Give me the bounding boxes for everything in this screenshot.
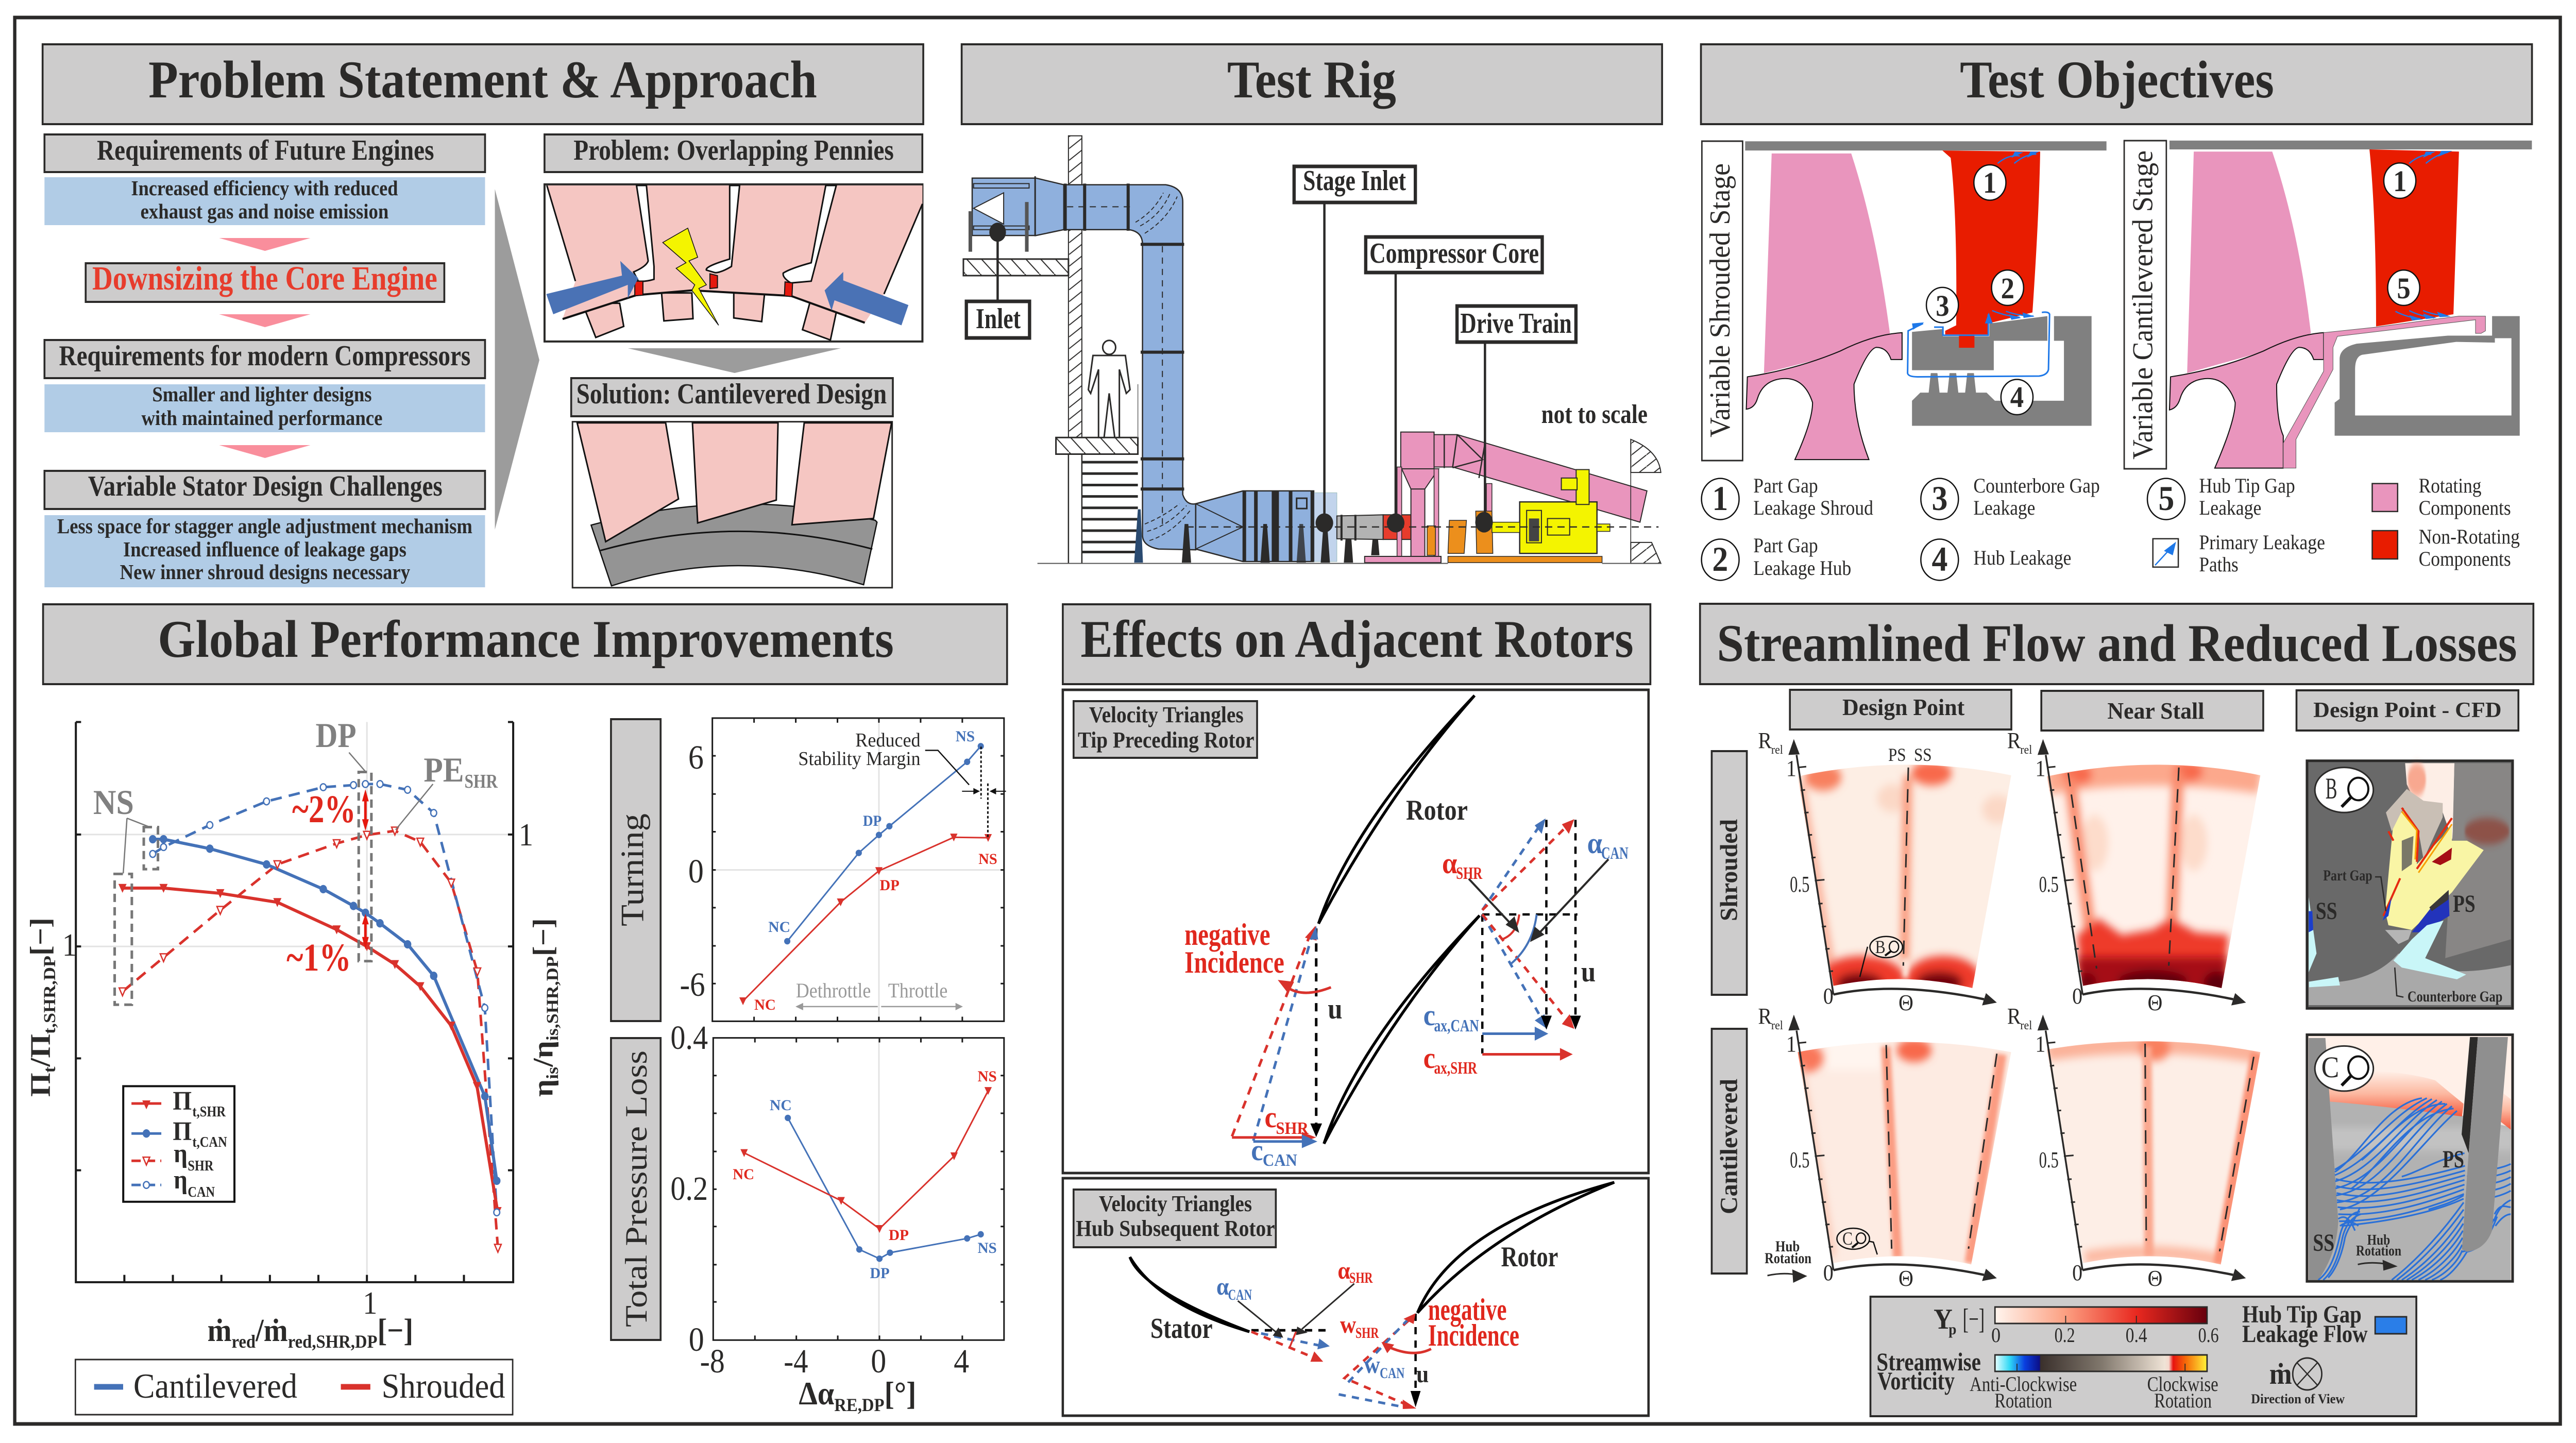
colour bar: total pressure loss [1934, 1303, 2219, 1347]
subheading: requirements of future engines: Requirements of Future Engines [97, 134, 434, 166]
colour bar: total pressure loss: Y [1934, 1303, 1953, 1335]
axis labels: cantilevered near stall: R [2007, 1004, 2021, 1029]
text: leakage numbers: 2 [2001, 272, 2014, 305]
text: leakage numbers: 1 [1712, 479, 1728, 518]
axis labels: shrouded near stall: R [2007, 728, 2021, 753]
axis labels: shrouded near stall: 0.5 [2039, 872, 2059, 897]
tick labels: turning and loss charts: 0.4 [670, 1018, 708, 1057]
panel: global performance improvements [25, 604, 1007, 1415]
legend: configuration [75, 1360, 513, 1415]
panel: streamlined flow and reduced losses [1700, 604, 2533, 1416]
text block: engine requirements: Increased efficiency with reduced [131, 177, 398, 200]
text: leakage numbers: 5 [2397, 272, 2411, 305]
text block: engine requirements: exhaust gas and noise emission [141, 200, 388, 223]
axis label: total pressure ratio: [−] [25, 918, 56, 956]
annotation: hub rotation [1765, 1238, 1811, 1283]
text: legend descriptions: Rotating [2419, 474, 2481, 497]
panel: problem statement and approach [43, 44, 923, 588]
image: cfd detail C: C [2321, 1051, 2339, 1084]
legend: direction of view: ṁ [2269, 1357, 2292, 1390]
labels: tip velocity symbols: CAN [1263, 1151, 1297, 1170]
legend: colour scales [1870, 1297, 2416, 1416]
labels: turning operating points: NC [770, 1097, 792, 1114]
heat map: shrouded design point [1788, 739, 2021, 1006]
annotation: hub rotation: Hub [1775, 1238, 1800, 1255]
legend: direction of view [2251, 1357, 2345, 1406]
annotation: reduced stability margin: Reduced [855, 729, 921, 751]
text: leakage numbers: 2 [1712, 540, 1728, 579]
tag: hub subsequent rotor [1074, 1190, 1276, 1247]
diagram: shrouded stage section [1745, 141, 2107, 460]
labels: tip velocity symbols: SHR [1456, 864, 1483, 883]
callout: negative incidence hub: Incidence [1428, 1319, 1519, 1353]
colour bar: total pressure loss: 0.2 [2055, 1324, 2075, 1347]
label: variable cantilevered stage [2124, 141, 2166, 469]
label: rotor tip: Rotor [1406, 794, 1468, 826]
colour bar: streamwise vorticity [1876, 1348, 2218, 1412]
image: cfd detail B: SS [2316, 897, 2337, 924]
label: compressor core: Compressor Core [1369, 237, 1539, 269]
colour bar: total pressure loss: 0.6 [2198, 1324, 2219, 1347]
legend: map series labels: η [174, 1165, 188, 1195]
axis label: reduced mass flow: /ṁ [255, 1313, 288, 1348]
axis label: incidence change: Δα [799, 1376, 834, 1412]
annotation: throttle direction: Dethrottle [796, 979, 871, 1002]
axis labels: cantilevered design point: Θ [1899, 1266, 1913, 1291]
heading: problem statement [43, 44, 923, 124]
axis labels: cantilevered design point: 1 [1786, 1032, 1797, 1057]
text: legend descriptions: Leakage [2199, 497, 2261, 519]
legend: hub tip gap leakage flow [2242, 1300, 2406, 1347]
colour bar: streamwise vorticity: Vorticity [1877, 1367, 1955, 1396]
panel: test rig [962, 44, 1662, 564]
axis labels: shrouded design point: PS [1888, 745, 1906, 765]
labels: turning operating points [733, 728, 997, 1282]
tick labels: turning and loss charts: 0 [688, 852, 704, 890]
legend: map series labels: t,SHR [193, 1104, 226, 1119]
label: total pressure loss [611, 1038, 660, 1340]
axes: cantilevered near stall [2038, 1014, 2246, 1281]
column head: design point [1790, 690, 2011, 729]
text: legend descriptions: Hub Leakage [1973, 547, 2071, 569]
callout: negative incidence tip: negative [1184, 918, 1270, 952]
legend: direction of view: Direction of View [2251, 1392, 2345, 1406]
labels: hub velocity symbols: α [1337, 1257, 1350, 1284]
text: leakage numbers: 4 [2010, 381, 2024, 414]
axis labels: shrouded design point: rel [1771, 743, 1783, 756]
legend: map series labels: CAN [188, 1184, 215, 1200]
axis label: total pressure ratio: Π [25, 1073, 56, 1097]
labels: turning operating points: NS [977, 1240, 997, 1257]
labels: turning operating points: NS [956, 728, 975, 745]
annotation: throttle direction [796, 979, 947, 1002]
panel: effects on adjacent rotors [1063, 604, 1650, 1416]
heading: test objectives: Test Objectives [1960, 50, 2274, 109]
label: inlet: Inlet [976, 302, 1021, 335]
text block: design challenges: Increased influence of leakage gaps [123, 538, 406, 561]
label: variable cantilevered stage: Variable Cantilevered Stage [2126, 150, 2159, 460]
image: cfd detail B: B [2326, 772, 2337, 805]
label: turning [611, 719, 660, 1021]
axis labels: cantilevered design point: rel [1771, 1018, 1783, 1032]
labels: turning operating points: NC [754, 996, 776, 1013]
arrow: grey down [628, 348, 841, 373]
tag: tip preceding rotor [1074, 701, 1257, 758]
axis labels: shrouded near stall: 0 [2072, 984, 2082, 1009]
axis label: reduced mass flow: ṁ [208, 1313, 232, 1348]
text block: design challenges: New inner shroud designs necessary [120, 561, 410, 584]
labels: hub velocity symbols: CAN [1228, 1286, 1252, 1303]
axis labels: shrouded design point [1758, 728, 1932, 1015]
labels: turning operating points: DP [889, 1227, 909, 1244]
row label: cantilevered: Cantilevered [1716, 1079, 1742, 1214]
axes: cantilevered design point [1788, 1014, 1997, 1281]
axis label: reduced mass flow: [−] [377, 1313, 413, 1348]
heading: effects on adjacent rotors: Effects on Adjacent Rotors [1080, 610, 1634, 669]
axis label: total pressure ratio: t,SHR,DP [41, 956, 59, 1034]
tick labels: turning and loss charts: -4 [784, 1342, 808, 1380]
labels: hub velocity symbols: SHR [1355, 1325, 1379, 1342]
labels: turning operating points: DP [863, 812, 882, 829]
text: legend descriptions [1753, 474, 2520, 580]
axis labels: cantilevered design point: 0 [1823, 1261, 1834, 1285]
row label: shrouded: Shrouded [1716, 819, 1742, 921]
text: leakage numbers: 3 [1936, 290, 1950, 322]
text block: design challenges: Less space for stagger angle adjustment mechanism [57, 515, 472, 538]
axis labels: shrouded design point: R [1758, 728, 1772, 753]
subheading: design challenges: Variable Stator Design Challenges [88, 470, 443, 502]
label: drive train: Drive Train [1460, 307, 1572, 339]
panel: hub subsequent rotor [1063, 1178, 1649, 1416]
legend: map series labels [173, 1086, 227, 1200]
label: peak efficiency: PE [423, 751, 464, 790]
labels: tip velocity symbols: u [1328, 993, 1343, 1025]
text: leakage numbers [1712, 165, 2411, 579]
labels: turning operating points: NS [977, 1068, 997, 1085]
tick labels: map: 1 [363, 1285, 377, 1321]
axis label: efficiency ratio: η [528, 1079, 559, 1097]
row label: shrouded [1711, 751, 1747, 995]
text: legend descriptions: Part Gap [1753, 474, 1818, 497]
axis labels: shrouded near stall: Θ [2147, 991, 2162, 1015]
label: variable shrouded stage: Variable Shrouded Stage [1704, 163, 1736, 437]
row label: cantilevered [1711, 1029, 1747, 1274]
colour bar: total pressure loss: 0 [1991, 1324, 2001, 1347]
axis labels: cantilevered near stall: 0 [2072, 1261, 2082, 1285]
axis labels: cantilevered near stall: rel [2020, 1018, 2032, 1032]
legend: map series labels: t,CAN [193, 1134, 227, 1150]
axis labels: cantilevered design point [1758, 1004, 1913, 1291]
callout: negative incidence hub: negative [1428, 1293, 1506, 1327]
annotation: reduced stability margin: Stability Margin [798, 748, 921, 769]
legend: map series labels: Π [173, 1116, 192, 1146]
axis label: efficiency ratio: [−] [528, 918, 559, 956]
labels: hub velocity symbols [1216, 1257, 1429, 1387]
subheading: modern compressors: Requirements for modern Compressors [59, 339, 470, 372]
labels: hub velocity symbols: w [1364, 1351, 1380, 1378]
colour bar: streamwise vorticity: Anti-Clockwise [1970, 1373, 2077, 1396]
text: legend descriptions: Components [2419, 548, 2511, 570]
labels: hub velocity symbols: w [1340, 1311, 1356, 1338]
heading: streamlined flow: Streamlined Flow and Reduced Losses [1717, 614, 2517, 673]
labels: turning operating points: NC [768, 919, 790, 936]
legend: map series labels: η [174, 1139, 188, 1168]
heading: test rig: Test Rig [1227, 50, 1396, 109]
axis label: incidence change: [°] [884, 1376, 916, 1412]
axis labels: shrouded design point: 1 [1786, 756, 1797, 781]
axis labels: shrouded near stall: 1 [2035, 756, 2045, 781]
text block: compressor requirements: with maintained performance [141, 406, 382, 430]
callout: downsizing the core engine: Downsizing the Core Engine [92, 259, 437, 297]
text: leakage numbers: 5 [2158, 479, 2174, 518]
tick labels: turning and loss charts [670, 738, 969, 1380]
column head: design point cfd: Design Point - CFD [2313, 698, 2502, 722]
axis labels: cantilevered near stall: Θ [2147, 1266, 2162, 1291]
labels: tip velocity symbols: c [1265, 1101, 1277, 1134]
diagram: test rig schematic [963, 136, 1661, 564]
axis labels: shrouded design point: 0 [1823, 984, 1834, 1009]
heat map: cantilevered near stall [2037, 1025, 2269, 1272]
image: cfd detail B [2307, 761, 2513, 1008]
legend: map series labels: Π [173, 1086, 192, 1116]
image: cfd detail B: Part Gap [2323, 867, 2372, 884]
callout: negative incidence tip: Incidence [1184, 946, 1284, 980]
labels: tip velocity symbols: u [1581, 956, 1596, 988]
tick labels: turning and loss charts: 0 [689, 1320, 704, 1359]
text: leakage numbers: 4 [1932, 540, 1947, 579]
diagram: velocity triangles hub [1130, 1182, 1614, 1409]
colour bar: streamwise vorticity: Streamwise [1876, 1348, 1981, 1377]
diagram: cantilevered stage section [2170, 141, 2532, 468]
arrow: large grey right [495, 189, 539, 530]
labels: hub velocity symbols: α [1216, 1272, 1229, 1300]
chart: turning [713, 718, 1006, 1021]
label: peak efficiency: SHR [464, 771, 498, 792]
colour bar: streamwise vorticity: Rotation [1994, 1389, 2052, 1412]
diagram: velocity triangles tip [1232, 695, 1608, 1148]
image: cfd detail C [2307, 1034, 2513, 1281]
annotation: hub rotation: Rotation [1765, 1250, 1811, 1267]
label: stator: Stator [1150, 1312, 1213, 1345]
panel: tip preceding rotor [1063, 690, 1649, 1173]
tick labels: turning and loss charts: 0 [871, 1342, 886, 1380]
panel: test objectives [1701, 44, 2532, 580]
heading: problem statement: Problem Statement & Approach [148, 50, 817, 109]
heading: streamlined flow [1700, 604, 2533, 684]
diagram: cantilevered blades [572, 422, 892, 588]
labels: tip velocity symbols: SHR [1276, 1119, 1309, 1138]
arrow: down 3 [219, 445, 311, 458]
callout: negative incidence tip [1184, 918, 1284, 980]
text: legend descriptions: Paths [2199, 553, 2239, 576]
chart: total pressure loss [713, 1038, 1004, 1340]
tag: hub subsequent rotor: Velocity Triangles [1099, 1192, 1252, 1216]
text: legend descriptions: Hub Tip Gap [2199, 474, 2295, 497]
label: peak efficiency [423, 751, 498, 792]
image: cfd detail B: Counterbore Gap [2408, 988, 2502, 1005]
heading: test objectives [1701, 44, 2532, 124]
annotation: reduced stability margin [798, 729, 921, 769]
axis label: efficiency ratio: is [544, 1067, 562, 1079]
axis label: efficiency ratio: is,SHR,DP [544, 956, 562, 1041]
text: legend descriptions: Primary Leakage [2199, 531, 2325, 554]
text: legend descriptions: Counterbore Gap [1973, 474, 2100, 497]
labels: turning operating points: NS [978, 851, 997, 868]
label: rotor hub: Rotor [1501, 1241, 1558, 1273]
diagram: overlapping pennies blades [545, 184, 922, 342]
axis labels: shrouded design point: Θ [1899, 991, 1913, 1015]
image: cfd detail C: Hub [2367, 1232, 2390, 1248]
legend: configuration: Shrouded [382, 1367, 505, 1406]
label: turning: Turning [615, 813, 651, 926]
axis labels: shrouded near stall [2007, 728, 2162, 1015]
axis labels: shrouded design point: 0.5 [1790, 872, 1809, 897]
image: cfd detail C: Rotation [2356, 1243, 2401, 1259]
axis labels: cantilevered near stall [2007, 1004, 2162, 1291]
heat map: shrouded near stall [2037, 739, 2269, 1006]
colour bar: total pressure loss: p [1948, 1321, 1956, 1338]
axis labels: cantilevered design point: R [1758, 1004, 1772, 1029]
label: design point: DP [316, 716, 357, 755]
labels: tip velocity symbols: α [1587, 827, 1602, 860]
axis labels: cantilevered design point: 0.5 [1790, 1148, 1809, 1173]
tick labels: turning and loss charts: -8 [700, 1342, 725, 1380]
axis label: reduced mass flow: red,SHR,DP [288, 1332, 377, 1352]
labels: tip velocity symbols: c [1423, 999, 1435, 1032]
axis labels: shrouded design point: SS [1914, 745, 1932, 765]
label: total pressure loss: Total Pressure Loss [619, 1050, 653, 1327]
axis labels: shrouded design point: B [1875, 937, 1886, 957]
text block: design challenges [44, 515, 485, 587]
tick labels: turning and loss charts: -6 [680, 965, 705, 1004]
text block: compressor requirements [44, 383, 485, 432]
labels: tip velocity symbols: c [1251, 1134, 1263, 1167]
image: cfd detail C: PS [2443, 1145, 2464, 1173]
tick labels: turning and loss charts: 0.2 [670, 1169, 708, 1208]
tag: tip preceding rotor: Tip Preceding Rotor [1078, 728, 1255, 753]
axis label: reduced mass flow: red [232, 1332, 256, 1352]
label: stage inlet: Stage Inlet [1303, 164, 1406, 197]
axis label: total pressure ratio: t [41, 1066, 59, 1073]
labels: hub velocity symbols: u [1416, 1360, 1429, 1387]
chart: compressor map [76, 722, 513, 1282]
text: leakage numbers: 1 [1983, 166, 1996, 199]
arrow: down 1 [219, 238, 311, 251]
subheading: solution cantilevered design: Solution: Cantilevered Design [577, 378, 887, 410]
labels: tip velocity symbols: ax,SHR [1434, 1059, 1478, 1078]
tag: tip preceding rotor: Velocity Triangles [1089, 703, 1244, 727]
legend: hub tip gap leakage flow: Hub Tip Gap [2242, 1300, 2362, 1328]
text: legend descriptions: Components [2419, 497, 2511, 519]
labels: turning operating points: DP [880, 877, 900, 894]
axis labels: cantilevered near stall: 0.5 [2039, 1148, 2059, 1173]
labels: tip velocity symbols: α [1442, 847, 1457, 880]
text: legend descriptions: Part Gap [1753, 534, 1818, 557]
heading: global performance [43, 604, 1007, 684]
heading: global performance: Global Performance Improvements [158, 610, 894, 669]
arrow: down 2 [219, 314, 311, 327]
legend: test objectives markers [1702, 163, 2420, 580]
text block: engine requirements [44, 177, 485, 225]
text: not to scale: not to scale [1541, 399, 1648, 429]
column head: near stall [2041, 691, 2263, 731]
labels: tip velocity symbols: CAN [1601, 844, 1629, 863]
labels: turning operating points: NC [733, 1166, 754, 1183]
axis label: total pressure ratio: /Π [25, 1034, 56, 1067]
text block: compressor requirements: Smaller and lighter designs [152, 383, 372, 406]
image: cfd detail B: PS [2453, 890, 2476, 917]
subheading: requirements of future engines [44, 134, 485, 172]
tick labels: map: 1 [519, 817, 533, 853]
image: cfd detail C: SS [2313, 1229, 2334, 1256]
label: near stall: NS [93, 783, 134, 822]
colour bar: total pressure loss: [−] [1963, 1303, 1985, 1335]
labels: tip velocity symbols: c [1423, 1042, 1435, 1075]
callout: 1 percent: ~1% [286, 936, 351, 979]
tick labels: map: 1 [62, 927, 77, 963]
column head: design point cfd [2296, 690, 2518, 731]
labels: tip velocity symbols [1251, 827, 1629, 1170]
tick labels: turning and loss charts: 4 [954, 1342, 969, 1380]
text: legend descriptions: Leakage [1973, 497, 2035, 519]
axis labels: shrouded near stall: rel [2020, 743, 2032, 756]
heading: test rig [962, 44, 1662, 124]
tag: hub subsequent rotor: Hub Subsequent Rotor [1076, 1216, 1275, 1241]
column head: near stall: Near Stall [2107, 698, 2204, 724]
text: legend descriptions: Non-Rotating [2419, 525, 2520, 548]
heat map: cantilevered design point [1798, 1042, 2011, 1264]
legend: map series labels: SHR [188, 1158, 214, 1174]
labels: turning operating points: DP [870, 1265, 890, 1282]
colour bar: streamwise vorticity: Clockwise [2147, 1373, 2218, 1396]
labels: tip velocity symbols: ax,CAN [1434, 1016, 1479, 1035]
labels: hub velocity symbols: SHR [1349, 1269, 1373, 1286]
colour bar: total pressure loss: 0.4 [2126, 1324, 2147, 1347]
heading: effects on adjacent rotors [1063, 604, 1650, 684]
subheading: problem overlapping pennies: Problem: Overlapping Pennies [573, 134, 894, 166]
column head: design point: Design Point [1842, 694, 1965, 720]
colour bar: streamwise vorticity: Rotation [2154, 1389, 2212, 1412]
axis labels: cantilevered design point: C [1842, 1229, 1853, 1249]
legend: hub tip gap leakage flow: Leakage Flow [2242, 1320, 2368, 1347]
text: leakage numbers: 1 [2393, 165, 2406, 198]
legend: configuration: Cantilevered [133, 1367, 297, 1406]
annotation: throttle direction: Throttle [888, 979, 947, 1002]
text: legend descriptions: Leakage Hub [1753, 557, 1851, 580]
axis labels: cantilevered near stall: 1 [2035, 1032, 2045, 1057]
tick labels: turning and loss charts: 6 [688, 738, 704, 776]
text: leakage numbers: 3 [1932, 479, 1947, 518]
labels: hub velocity symbols: CAN [1380, 1365, 1405, 1382]
text: legend descriptions: Leakage Shroud [1753, 497, 1873, 519]
tick labels: map [62, 817, 533, 1321]
callout: negative incidence hub [1428, 1293, 1519, 1353]
axis label: incidence change: RE,DP [834, 1395, 884, 1415]
callout: 2 percent: ~2% [292, 787, 356, 831]
axis label: efficiency ratio: /η [528, 1041, 559, 1067]
